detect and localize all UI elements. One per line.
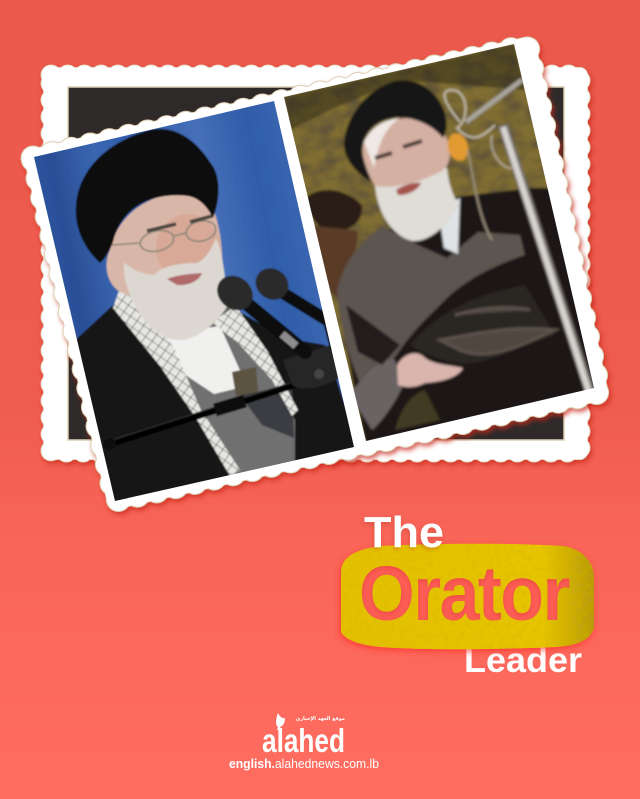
checked scarf [113, 282, 298, 476]
brows [147, 216, 212, 231]
website address: english.alahednews.com.lb [229, 756, 379, 771]
brows and eyes [375, 141, 422, 158]
background figure body [315, 226, 359, 298]
foliage background [284, 44, 548, 441]
white shirt [166, 326, 241, 395]
neck tan detail [232, 367, 258, 396]
microphone bracket [284, 344, 338, 388]
microphone one [210, 269, 305, 352]
yellow label [341, 544, 594, 649]
hand [397, 353, 463, 387]
logo arabic tagline: موقع العهد الإخباري [296, 716, 345, 722]
microphone arm [466, 80, 522, 122]
front tilted photo frame [33, 46, 599, 500]
grey vest [206, 398, 242, 416]
black turban [344, 80, 447, 182]
title word: Orator: Orator [359, 551, 569, 637]
icon: flame [276, 713, 285, 730]
background figure hair [305, 190, 362, 232]
logo [229, 713, 379, 771]
microphone stand arm [107, 384, 297, 445]
dark seated robe [345, 188, 605, 445]
robe left [70, 305, 235, 510]
orange microphone [446, 132, 470, 162]
logo wordmark: alahed [262, 722, 345, 759]
white beard [124, 238, 228, 340]
black turban [76, 129, 218, 263]
mid robe folds [410, 285, 555, 364]
microphone stand pole [503, 125, 590, 392]
face [107, 192, 222, 300]
robe right [240, 312, 354, 460]
back frame dark image [68, 87, 564, 440]
title word: Leader: Leader [464, 641, 582, 680]
grey robe upper [337, 226, 525, 400]
title word: The: The [364, 508, 444, 557]
microphone two [254, 268, 332, 351]
chest base [209, 306, 296, 470]
white beard [375, 168, 459, 241]
face [363, 117, 450, 187]
mouth [396, 183, 421, 195]
right photo: speaker seated at microphone stand [284, 44, 594, 441]
glasses [112, 218, 218, 255]
white collar [438, 198, 460, 254]
back photo frame [51, 75, 580, 452]
lips [167, 273, 202, 285]
left photo: speaker at microphones on blue backdrop [34, 101, 354, 501]
